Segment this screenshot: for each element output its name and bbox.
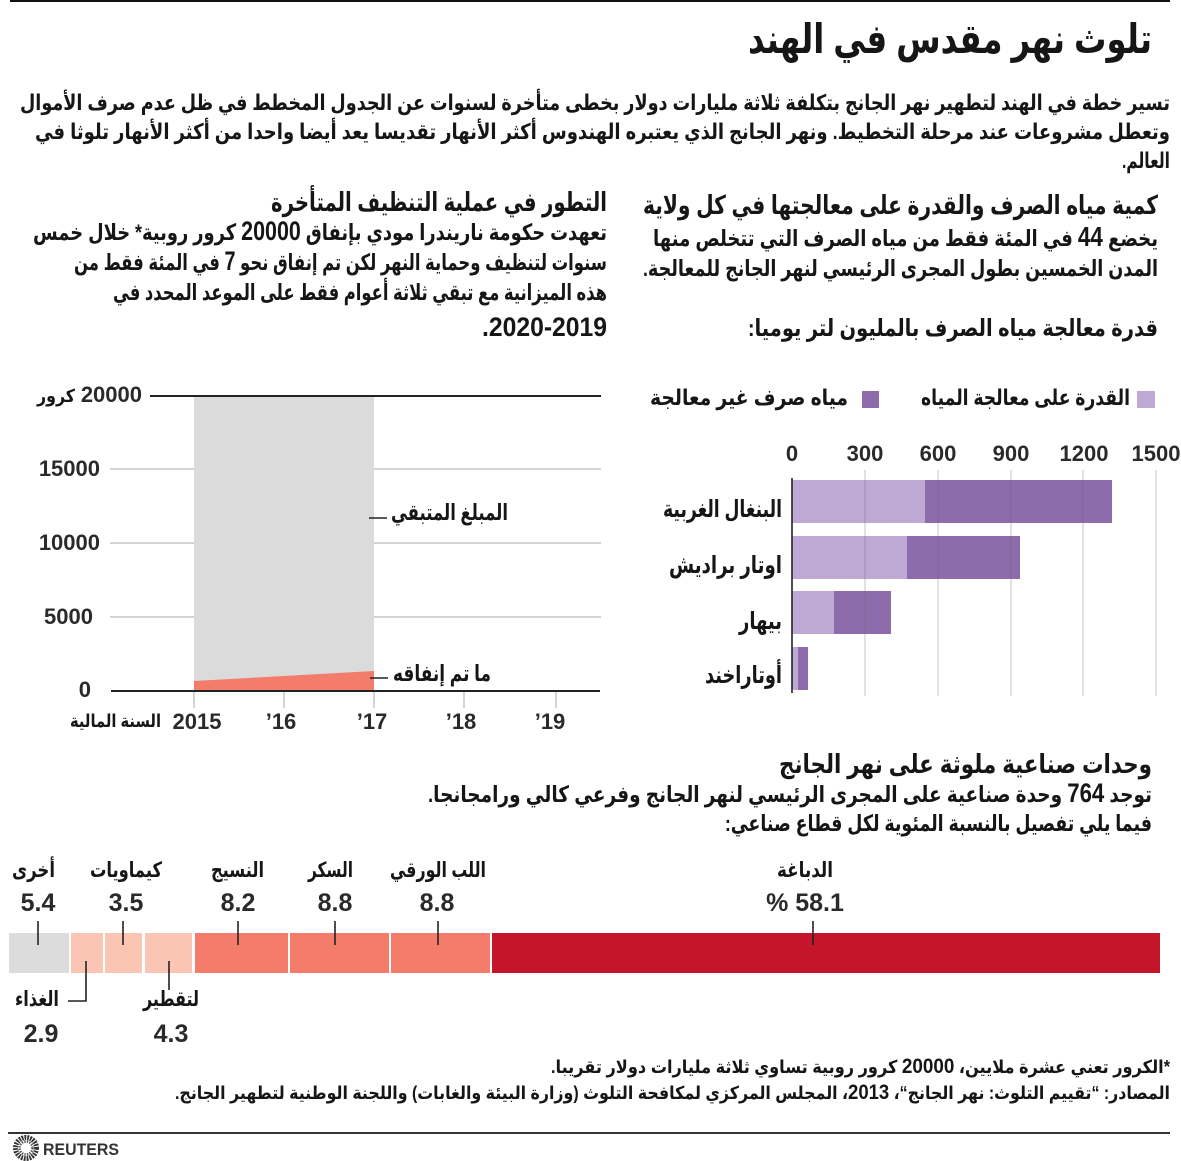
text block: cleanup description: .2020-2019 <box>482 312 607 342</box>
area chart: spending versus budget: 10000 <box>39 530 100 555</box>
area chart: spending versus budget: 2015 <box>173 709 221 734</box>
sector labels: أخرى <box>12 855 55 882</box>
legend <box>650 385 1155 411</box>
bar chart: treatment capacity by state: 0 <box>786 441 798 466</box>
sector labels: كيماويات <box>90 859 163 882</box>
text block: cleanup description <box>33 216 607 342</box>
sector labels: الغذاء <box>15 988 59 1011</box>
bar chart: treatment capacity by state: 300 <box>847 441 883 466</box>
bar chart: treatment capacity by state: 900 <box>993 441 1029 466</box>
area chart: spending versus budget <box>36 382 601 734</box>
sector labels: السكر <box>307 859 353 882</box>
text block: cleanup description: تعهدت حكومة ناريندرا مودي بإنفاق 20000 كرور روبية* خلال خمس <box>33 216 607 246</box>
area chart: spending versus budget: ’16 <box>266 709 296 734</box>
sector labels: الدباغة <box>777 859 833 882</box>
legend: القدرة على معالجة المياه <box>921 385 1130 410</box>
area chart: spending versus budget: ما تم إنفاقه <box>393 661 491 687</box>
sector labels: 2.9 <box>24 1020 58 1048</box>
text block: units description: توجد 764 وحدة صناعية على المجرى الرئيسي لنهر الجانج وفرعي كالي ورامجانجا. <box>428 778 1152 808</box>
footnotes: المصادر: “تقييم التلوث: نهر الجانج“، 2013، المجلس المركزي لمكافحة التلوث (وزارة البيئة والغابات) واللجنة الوطنية لتطهير الجانج. <box>175 1081 1170 1104</box>
bar chart: treatment capacity by state: أوتاراخند <box>705 659 782 689</box>
area chart: spending versus budget: 5000 <box>44 604 93 629</box>
sector labels: النسيج <box>211 859 264 882</box>
area chart: spending versus budget: ’18 <box>446 709 476 734</box>
area chart: spending versus budget: السنة المالية <box>70 711 161 731</box>
panel: sewage treatment <box>643 190 1180 696</box>
panel: cleanup progress <box>33 185 607 734</box>
sector labels: اللب الورقي <box>390 859 486 882</box>
text block: units description <box>428 778 1152 837</box>
text block: cleanup description: سنوات لتنظيف وحماية النهر لكن تم إنفاق نحو 7 في المئة فقط من <box>74 246 607 276</box>
stacked bar: sector shares <box>9 933 1160 973</box>
area chart: spending versus budget: 15000 <box>39 456 100 481</box>
text block: cleanup description: هذه الميزانية مع تبقي ثلاثة أعوام فقط على الموعد المحدد في <box>113 277 607 306</box>
bar chart: treatment capacity by state: 1500 <box>1132 441 1180 466</box>
panel: polluting industrial units <box>9 749 1160 1048</box>
legend: مياه صرف غير معالجة <box>650 385 848 411</box>
sector labels: % 58.1 <box>766 889 844 917</box>
bar chart: treatment capacity by state: 600 <box>920 441 956 466</box>
icon: Reuters logo: REUTERS <box>43 1140 119 1159</box>
sector labels: 5.4 <box>21 889 55 917</box>
sector labels: 8.8 <box>420 889 454 917</box>
text block: sewage description <box>643 221 1158 282</box>
text block: sewage description: يخضع 44 في المئة فقط من مياه الصرف التي تتخلص منها <box>653 221 1158 252</box>
footnotes <box>175 1055 1170 1104</box>
bar chart: treatment capacity by state: البنغال الغربية <box>663 496 782 523</box>
bar chart: treatment capacity by state: 1200 <box>1060 441 1108 466</box>
area chart: spending versus budget: ’17 <box>357 709 387 734</box>
sector labels: لتقطير <box>142 988 199 1011</box>
area chart: spending versus budget: 20000 <box>81 382 142 407</box>
sector labels: 3.5 <box>109 889 143 917</box>
sector labels: 8.8 <box>318 889 352 917</box>
area chart: spending versus budget: كرور <box>36 386 75 407</box>
icon: Reuters logo <box>16 1138 119 1159</box>
sector labels: 8.2 <box>221 889 255 917</box>
bar chart: treatment capacity by state: بيهار <box>738 608 782 635</box>
bar chart: treatment capacity by state: اوتار براديش <box>669 552 782 579</box>
intro text <box>20 88 1170 173</box>
area chart: spending versus budget: المبلغ المتبقي <box>391 500 508 526</box>
bar chart: treatment capacity by state <box>663 441 1180 696</box>
area chart: spending versus budget: 0 <box>79 677 91 702</box>
sector labels: 4.3 <box>154 1020 188 1048</box>
area chart: spending versus budget: ’19 <box>535 709 565 734</box>
footnotes: *الكرور تعني عشرة ملايين، 20000 كرور روبية تساوي ثلاثة مليارات دولار تقريبا. <box>551 1055 1170 1078</box>
sector labels <box>12 855 844 1048</box>
heading: delayed cleanup: التطور في عملية التنظيف المتأخرة <box>271 185 607 218</box>
